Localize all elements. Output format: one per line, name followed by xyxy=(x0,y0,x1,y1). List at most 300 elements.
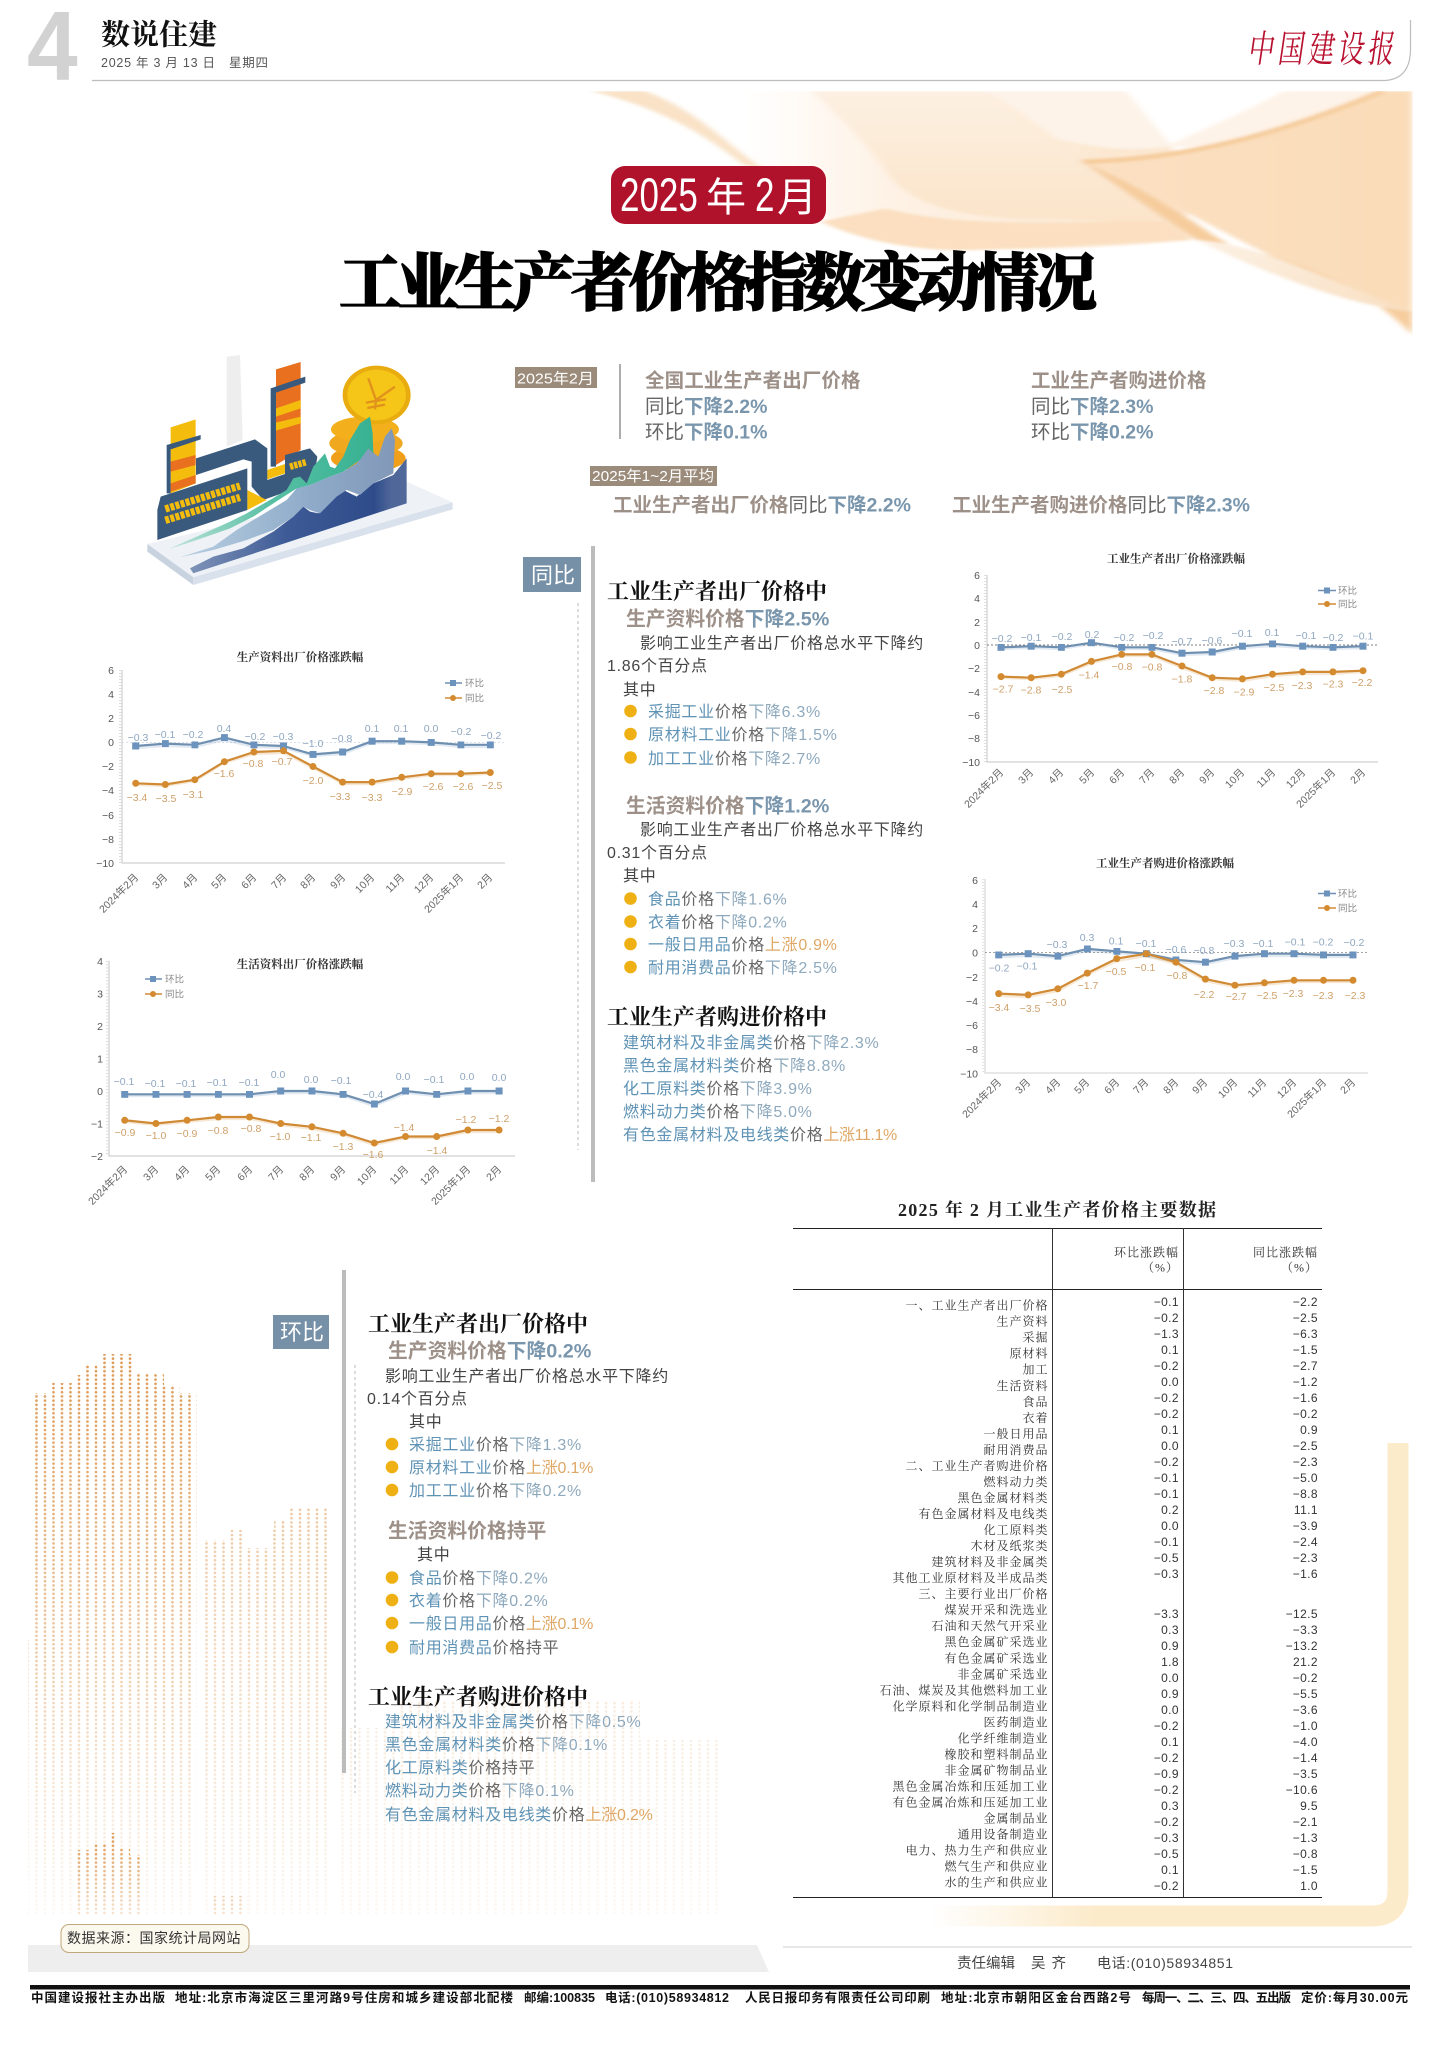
chart: 生活资料出厂价格涨跌幅: 0.0 xyxy=(271,1069,285,1081)
column: 同比 values: −4.0 xyxy=(1293,1735,1318,1749)
block: purchase list: 化工原料类价格下降3.9% xyxy=(623,1080,813,1098)
table header: 环比涨跌幅 xyxy=(1114,1245,1179,1260)
row labels: 电力、热力生产和供应业 xyxy=(905,1843,1048,1858)
chart: 生活资料出厂价格涨跌幅: 2月 xyxy=(484,1164,504,1184)
chart: 工业生产者购进价格涨跌幅: −0.1 xyxy=(1285,936,1306,948)
chart: 工业生产者出厂价格涨跌幅: 2025年1月 xyxy=(1293,766,1338,811)
chart: 工业生产者购进价格涨跌幅: −0.1 xyxy=(1136,938,1157,950)
panel: purchase prices: 同比下降2.3% xyxy=(1031,396,1153,418)
column: 环比 values: −0.2 xyxy=(1154,1751,1179,1765)
column: 同比 values: −12.5 xyxy=(1286,1607,1318,1621)
column: 环比 values: 0.1 xyxy=(1161,1863,1179,1877)
chart: 生产资料出厂价格涨跌幅: −10 xyxy=(96,858,114,870)
footer imprint: 人民日报印务有限责任公司印刷 xyxy=(745,1990,930,2005)
block: means of production: 采掘工业价格下降6.3% xyxy=(648,703,821,721)
row labels: 加工 xyxy=(1022,1362,1048,1377)
chart: 生产资料出厂价格涨跌幅: −3.3 xyxy=(330,791,351,803)
date pill: 月 xyxy=(777,176,817,220)
chart: 工业生产者购进价格涨跌幅: −1.7 xyxy=(1078,980,1099,992)
chart: 工业生产者出厂价格涨跌幅: −2.7 xyxy=(993,684,1014,696)
row labels: 化工原料类 xyxy=(983,1522,1048,1537)
row labels: 有色金属矿采选业 xyxy=(944,1650,1048,1665)
chart: 工业生产者出厂价格涨跌幅: 同比 xyxy=(1338,598,1357,610)
chart: 工业生产者购进价格涨跌幅: −2.3 xyxy=(1313,990,1334,1002)
editor credit xyxy=(957,1955,1233,1972)
column: 同比 values: −3.6 xyxy=(1293,1703,1318,1717)
chart: 生产资料出厂价格涨跌幅: 2024年2月 xyxy=(96,871,141,916)
block: means of production: 0.14个百分点 xyxy=(367,1390,468,1408)
table header xyxy=(1114,1245,1318,1274)
chart: 生产资料出厂价格涨跌幅: 9月 xyxy=(328,872,348,892)
editor credit: 电话:(010)58934851 xyxy=(1097,1955,1233,1971)
chart: 工业生产者出厂价格涨跌幅: 0.2 xyxy=(1085,629,1099,641)
row labels: 二、工业生产者购进价格 xyxy=(905,1458,1048,1473)
column: 同比 values: −1.6 xyxy=(1293,1567,1318,1581)
chart: 生活资料出厂价格涨跌幅: 5月 xyxy=(203,1164,223,1184)
column: 环比 values: −0.3 xyxy=(1154,1567,1179,1581)
row labels: 黑色金属材料类 xyxy=(957,1490,1048,1505)
chart: 工业生产者购进价格涨跌幅: −0.1 xyxy=(1017,960,1038,972)
column: 同比 values: −6.3 xyxy=(1293,1327,1318,1341)
column: 同比 values: 21.2 xyxy=(1293,1655,1318,1669)
chart: 生活资料出厂价格涨跌幅: 0.0 xyxy=(492,1072,506,1084)
column: 环比 values: −0.5 xyxy=(1154,1551,1179,1565)
column: 同比 values: −1.0 xyxy=(1293,1719,1318,1733)
chart: 工业生产者出厂价格涨跌幅: −10 xyxy=(962,757,980,769)
panel: purchase prices xyxy=(1031,370,1207,444)
chart: 生产资料出厂价格涨跌幅: −3.4 xyxy=(127,792,148,804)
chart: 工业生产者出厂价格涨跌幅: −2.9 xyxy=(1234,686,1255,698)
block: purchase list: 有色金属材料及电线类价格上涨0.2% xyxy=(385,1806,653,1824)
chart: 工业生产者购进价格涨跌幅: −0.2 xyxy=(1344,937,1365,949)
chart: 工业生产者购进价格涨跌幅: −3.0 xyxy=(1046,997,1067,1009)
column: 环比 values: 0.9 xyxy=(1161,1687,1179,1701)
data source callout: 数据来源：国家统计局网站 xyxy=(67,1930,241,1946)
chart: 生产资料出厂价格涨跌幅: −0.3 xyxy=(273,731,294,743)
chart: 生产资料出厂价格涨跌幅: 10月 xyxy=(353,872,377,896)
chart: 生活资料出厂价格涨跌幅: −1.0 xyxy=(270,1131,291,1143)
panel: national ex-factory prices: 全国工业生产者出厂价格 xyxy=(645,369,861,392)
chart: 工业生产者出厂价格涨跌幅: 工业生产者出厂价格涨跌幅 xyxy=(1107,552,1245,566)
chart: 生产资料出厂价格涨跌幅: 4月 xyxy=(180,872,200,892)
chart: 生活资料出厂价格涨跌幅: −0.8 xyxy=(208,1125,229,1137)
chart: 工业生产者出厂价格涨跌幅: 4 xyxy=(974,593,980,605)
chart: 工业生产者出厂价格涨跌幅: 8月 xyxy=(1167,767,1187,787)
chart: 工业生产者购进价格涨跌幅: 7月 xyxy=(1131,1077,1151,1097)
block: means of production: 生产资料价格下降2.5% xyxy=(626,609,830,631)
panel: national ex-factory prices: 同比下降2.2% xyxy=(645,396,767,418)
chart: 生活资料出厂价格涨跌幅: 7月 xyxy=(266,1164,286,1184)
chart: 生活资料出厂价格涨跌幅: 环比 xyxy=(165,974,184,986)
block: purchase list: 黑色金属材料类价格下降8.8% xyxy=(623,1057,846,1075)
chart: 工业生产者出厂价格涨跌幅: 4月 xyxy=(1046,767,1066,787)
chart: 生产资料出厂价格涨跌幅: 0 xyxy=(108,737,114,749)
chart: 生活资料出厂价格涨跌幅: −1 xyxy=(91,1118,103,1130)
column: 环比 values: −0.2 xyxy=(1154,1311,1179,1325)
block: means of production: 加工工业价格下降0.2% xyxy=(409,1482,582,1500)
column: 同比 values: −2.3 xyxy=(1293,1551,1318,1565)
block: purchase list: 建筑材料及非金属类价格下降2.3% xyxy=(623,1034,879,1052)
row labels: 三、主要行业出厂价格 xyxy=(918,1586,1048,1601)
column: 同比 values: −2.5 xyxy=(1293,1311,1318,1325)
chart: 生产资料出厂价格涨跌幅: −2.5 xyxy=(482,780,503,792)
block: consumer goods: 一般日用品价格上涨0.1% xyxy=(409,1615,593,1633)
chart: 工业生产者购进价格涨跌幅: 8月 xyxy=(1161,1077,1181,1097)
chart: 工业生产者购进价格涨跌幅: −0.6 xyxy=(1166,944,1187,956)
section name: 数说住建 xyxy=(101,18,217,52)
row labels: 黑色金属冶炼和压延加工业 xyxy=(892,1778,1048,1794)
panel: national ex-factory prices: 环比下降0.1% xyxy=(645,422,767,444)
chart: 生活资料出厂价格涨跌幅: −1.4 xyxy=(427,1145,448,1157)
chart: 生活资料出厂价格涨跌幅: −0.1 xyxy=(114,1076,135,1088)
chart: 生活资料出厂价格涨跌幅: −1.1 xyxy=(301,1132,322,1144)
chart: 生产资料出厂价格涨跌幅: 2 xyxy=(108,713,114,725)
chart: 工业生产者购进价格涨跌幅: −4 xyxy=(966,996,978,1008)
chart: 生产资料出厂价格涨跌幅: −2.6 xyxy=(423,781,444,793)
date pill: 2 xyxy=(755,168,774,221)
chart: 工业生产者购进价格涨跌幅: −0.2 xyxy=(1313,936,1334,948)
tag: 环比: 环比 xyxy=(280,1320,324,1345)
chart: 生活资料出厂价格涨跌幅: 生活资料出厂价格涨跌幅 xyxy=(237,957,364,971)
column: 同比 values: −2.4 xyxy=(1293,1535,1318,1549)
chart: 生产资料出厂价格涨跌幅: 8月 xyxy=(298,872,318,892)
column: 环比 values: −0.3 xyxy=(1154,1831,1179,1845)
chart: 工业生产者出厂价格涨跌幅: −6 xyxy=(968,710,980,722)
block: means of production: 原材料工业价格下降1.5% xyxy=(648,726,838,744)
column: 环比 values: 0.1 xyxy=(1161,1343,1179,1357)
chart: 生产资料出厂价格涨跌幅: 0.1 xyxy=(365,723,379,735)
date pill: 2025 xyxy=(620,168,698,221)
chart: 生活资料出厂价格涨跌幅: 0.0 xyxy=(304,1074,318,1086)
chart: 生活资料出厂价格涨跌幅: −0.9 xyxy=(115,1127,136,1139)
chart: 生活资料出厂价格涨跌幅: 2024年2月 xyxy=(85,1163,130,1208)
chart: 生活资料出厂价格涨跌幅: −2 xyxy=(91,1151,103,1163)
column: 同比 values: −10.6 xyxy=(1286,1783,1318,1797)
date pill: 年 xyxy=(706,176,746,220)
chart: 生活资料出厂价格涨跌幅: −1.3 xyxy=(333,1141,354,1153)
block: consumer goods: 生活资料价格持平 xyxy=(388,1521,546,1543)
chart: 工业生产者购进价格涨跌幅: −2.5 xyxy=(1257,990,1278,1002)
row labels: 非金属矿采选业 xyxy=(957,1666,1048,1681)
chart: 生活资料出厂价格涨跌幅: −0.1 xyxy=(331,1075,352,1087)
column: 同比 values: 11.1 xyxy=(1294,1503,1318,1517)
chart: 生产资料出厂价格涨跌幅: −2 xyxy=(102,761,114,773)
column: 同比 values: −1.5 xyxy=(1293,1863,1318,1877)
row labels: 一般日用品 xyxy=(983,1427,1048,1441)
chart: 生活资料出厂价格涨跌幅: −0.1 xyxy=(176,1078,197,1090)
footer imprint: 电话:(010)58934812 xyxy=(605,1990,729,2005)
row labels: 石油、煤炭及其他燃料加工业 xyxy=(879,1682,1048,1697)
chart: 工业生产者购进价格涨跌幅: −2.7 xyxy=(1226,991,1247,1003)
block: means of production: 生产资料价格下降0.2% xyxy=(388,1341,592,1363)
panel: purchase prices: 环比下降0.2% xyxy=(1031,422,1153,444)
block: purchase list: 燃料动力类价格下降0.1% xyxy=(385,1782,575,1800)
chart: 生活资料出厂价格涨跌幅: 4月 xyxy=(172,1164,192,1184)
chart: 工业生产者出厂价格涨跌幅: 3月 xyxy=(1016,767,1036,787)
chart: 生产资料出厂价格涨跌幅: 6 xyxy=(108,665,114,677)
column: 环比 values: −1.3 xyxy=(1154,1327,1179,1341)
chart: 工业生产者出厂价格涨跌幅: −1.8 xyxy=(1172,674,1193,686)
chart: 生活资料出厂价格涨跌幅: 11月 xyxy=(387,1164,411,1187)
chart: 生活资料出厂价格涨跌幅: −0.9 xyxy=(177,1128,198,1140)
chart: 工业生产者购进价格涨跌幅: −0.5 xyxy=(1106,966,1127,978)
row labels: 通用设备制造业 xyxy=(957,1827,1048,1842)
chart: 生产资料出厂价格涨跌幅: 4 xyxy=(108,689,114,701)
chart: 工业生产者出厂价格涨跌幅: 2月 xyxy=(1348,767,1368,787)
chart: 生产资料出厂价格涨跌幅: 6月 xyxy=(239,872,259,892)
chart: 工业生产者出厂价格涨跌幅: 2 xyxy=(974,617,980,629)
column: 同比 values: −3.5 xyxy=(1293,1767,1318,1781)
chart: 工业生产者购进价格涨跌幅: 5月 xyxy=(1072,1077,1092,1097)
newspaper logo: 中国建设报 xyxy=(1246,28,1402,71)
chart: 生产资料出厂价格涨跌幅: −3.5 xyxy=(156,793,177,805)
chart: 工业生产者购进价格涨跌幅: −0.3 xyxy=(1224,938,1245,950)
column: 环比 values: 0.2 xyxy=(1161,1503,1179,1517)
title: 工业生产者价格指数变动情况 xyxy=(339,249,1097,319)
chart: 生产资料出厂价格涨跌幅: −2.6 xyxy=(453,781,474,793)
chart: 生产资料出厂价格涨跌幅: −1.6 xyxy=(214,768,235,780)
chart: 生产资料出厂价格涨跌幅: −6 xyxy=(102,810,114,822)
chart: 生活资料出厂价格涨跌幅: 10月 xyxy=(355,1164,379,1188)
chart: 工业生产者出厂价格涨跌幅: −2.2 xyxy=(1352,677,1373,689)
panel: purchase prices: 工业生产者购进价格 xyxy=(1031,370,1207,392)
chart: 工业生产者购进价格涨跌幅: 2025年1月 xyxy=(1284,1076,1329,1121)
column: 同比 values: 1.0 xyxy=(1300,1879,1318,1893)
chart: 工业生产者出厂价格涨跌幅: −2.8 xyxy=(1021,684,1042,696)
column: 环比 values: −0.1 xyxy=(1154,1295,1179,1309)
block: consumer goods: 衣着价格下降0.2% xyxy=(409,1592,548,1610)
data source callout xyxy=(61,1924,249,1952)
footer imprint: 每周一、二、三、四、五出版 xyxy=(1142,1990,1291,2005)
chart: 工业生产者出厂价格涨跌幅 xyxy=(961,552,1378,811)
block: consumer goods xyxy=(386,1521,593,1657)
chart: 生产资料出厂价格涨跌幅: −0.2 xyxy=(183,729,204,741)
chart: 生产资料出厂价格涨跌幅: 11月 xyxy=(383,872,407,895)
footer imprint: 定价:每月30.00元 xyxy=(1301,1990,1408,2005)
column: 同比 values: −8.8 xyxy=(1293,1487,1318,1501)
illustration: factory with coins and area chart xyxy=(147,355,453,585)
date pill xyxy=(611,166,826,224)
column: 同比 values: −1.4 xyxy=(1293,1751,1318,1765)
chart: 工业生产者出厂价格涨跌幅: −0.6 xyxy=(1202,635,1223,647)
row labels: 金属制品业 xyxy=(983,1811,1048,1826)
chart: 工业生产者购进价格涨跌幅: 9月 xyxy=(1190,1077,1210,1097)
chart: 工业生产者出厂价格涨跌幅: −0.2 xyxy=(1323,632,1344,644)
table header: （%） xyxy=(1281,1260,1318,1274)
chart: 生产资料出厂价格涨跌幅: −0.3 xyxy=(128,732,149,744)
chart: 生活资料出厂价格涨跌幅: −0.1 xyxy=(207,1077,228,1089)
dotted city skyline background xyxy=(28,1354,720,1915)
chart: 工业生产者购进价格涨跌幅: −2.3 xyxy=(1345,990,1366,1002)
chart: 生产资料出厂价格涨跌幅: 环比 xyxy=(465,678,484,690)
row labels: 木材及纸浆类 xyxy=(970,1538,1048,1553)
chart: 生活资料出厂价格涨跌幅: 1 xyxy=(97,1054,103,1066)
chart: 工业生产者出厂价格涨跌幅: −0.1 xyxy=(1353,630,1374,642)
block: consumer goods: 生活资料价格下降1.2% xyxy=(626,796,830,818)
column: 同比 values: 9.5 xyxy=(1300,1799,1318,1813)
column: 环比 values: 0.1 xyxy=(1161,1423,1179,1437)
chart: 工业生产者购进价格涨跌幅: −3.5 xyxy=(1020,1003,1041,1015)
ribbon background xyxy=(591,91,1412,335)
divider xyxy=(619,364,621,439)
tag: 环比 xyxy=(273,1315,329,1349)
issue date: 2025 年 3 月 13 日 星期四 xyxy=(101,56,269,70)
chart: 工业生产者出厂价格涨跌幅: −0.1 xyxy=(1296,630,1317,642)
chart: 生活资料出厂价格涨跌幅: −0.4 xyxy=(363,1089,384,1101)
chart: 生活资料出厂价格涨跌幅: 12月 xyxy=(418,1164,442,1188)
row labels: 化学原料和化学制品制造业 xyxy=(892,1698,1048,1713)
chart: 工业生产者购进价格涨跌幅: −10 xyxy=(960,1068,978,1080)
chart: 生产资料出厂价格涨跌幅: 2025年1月 xyxy=(421,871,466,916)
chart: 生活资料出厂价格涨跌幅: 3 xyxy=(97,988,103,1000)
chart: 生活资料出厂价格涨跌幅: −1.0 xyxy=(146,1130,167,1142)
chart: 工业生产者出厂价格涨跌幅: 5月 xyxy=(1077,767,1097,787)
block: means of production: 1.86个百分点 xyxy=(607,657,708,675)
tag: 同比: 同比 xyxy=(531,563,575,588)
row labels: 化学纤维制造业 xyxy=(957,1730,1048,1745)
chart: 工业生产者购进价格涨跌幅: 0 xyxy=(972,948,978,960)
chart: 生产资料出厂价格涨跌幅: 5月 xyxy=(209,872,229,892)
chart: 工业生产者出厂价格涨跌幅: 6 xyxy=(974,570,980,582)
chart: 工业生产者购进价格涨跌幅: 11月 xyxy=(1245,1077,1269,1100)
chart: 工业生产者出厂价格涨跌幅: −0.8 xyxy=(1112,661,1133,673)
chart: 生产资料出厂价格涨跌幅: −2.9 xyxy=(392,786,413,798)
block: means of production: 原材料工业价格上涨0.1% xyxy=(409,1459,593,1477)
chart: 生产资料出厂价格涨跌幅: −3.1 xyxy=(183,789,204,801)
block: purchase list: 黑色金属材料类价格下降0.1% xyxy=(385,1736,608,1754)
block: purchase list: 燃料动力类价格下降5.0% xyxy=(623,1103,813,1121)
chart: 生活资料出厂价格涨跌幅: 8月 xyxy=(297,1164,317,1184)
block: consumer goods: 一般日用品价格上涨0.9% xyxy=(648,936,838,954)
column: 同比 values: −2.7 xyxy=(1293,1359,1318,1373)
chart: 工业生产者出厂价格涨跌幅: −2.3 xyxy=(1292,680,1313,692)
chart: 生活资料出厂价格涨跌幅: 6月 xyxy=(235,1164,255,1184)
data table xyxy=(793,1199,1322,1898)
chart: 生活资料出厂价格涨跌幅: 9月 xyxy=(328,1164,348,1184)
chart: 工业生产者出厂价格涨跌幅: −0.2 xyxy=(992,633,1013,645)
panel: Jan-Feb average xyxy=(613,494,1250,516)
chart: 生产资料出厂价格涨跌幅: −0.7 xyxy=(272,756,293,768)
column: 同比 values: −1.6 xyxy=(1293,1391,1318,1405)
editor line rule xyxy=(783,1946,1412,1948)
chart: 工业生产者出厂价格涨跌幅: −2.8 xyxy=(1204,685,1225,697)
column: 环比 values: −0.2 xyxy=(1154,1391,1179,1405)
column: 环比 values: −3.3 xyxy=(1154,1607,1179,1621)
bottom gray band xyxy=(28,1945,769,1972)
chart: 工业生产者出厂价格涨跌幅: −0.1 xyxy=(1232,628,1253,640)
chart: 工业生产者出厂价格涨跌幅: 11月 xyxy=(1254,767,1278,790)
chart: 工业生产者出厂价格涨跌幅: −0.7 xyxy=(1172,636,1193,648)
chart: 工业生产者购进价格涨跌幅: 工业生产者购进价格涨跌幅 xyxy=(1096,856,1234,870)
chart: 生产资料出厂价格涨跌幅: 3月 xyxy=(150,872,170,892)
chart: 工业生产者出厂价格涨跌幅: −0.1 xyxy=(1021,632,1042,644)
chart: 工业生产者购进价格涨跌幅: 环比 xyxy=(1338,888,1357,900)
row labels: 有色金属材料及电线类 xyxy=(918,1506,1048,1521)
block: consumer goods: 0.31个百分点 xyxy=(607,844,708,862)
row labels: 原材料 xyxy=(1009,1346,1048,1361)
chart: 生活资料出厂价格涨跌幅: −0.1 xyxy=(239,1077,260,1089)
column: 同比 values: −2.5 xyxy=(1293,1439,1318,1453)
column: 同比 values: −0.2 xyxy=(1293,1671,1318,1685)
chart: 生产资料出厂价格涨跌幅: 0.0 xyxy=(424,723,438,735)
chart: 工业生产者购进价格涨跌幅: 2 xyxy=(972,923,978,935)
block: means of production: 其中 xyxy=(623,681,656,699)
block: means of production: 影响工业生产者出厂价格总水平下降约 xyxy=(640,635,924,653)
column: 同比 values: −13.2 xyxy=(1286,1639,1318,1653)
heading: ex-factory: 工业生产者出厂价格中 xyxy=(368,1311,588,1336)
chart: 工业生产者出厂价格涨跌幅: −0.2 xyxy=(1114,632,1135,644)
chart: 生产资料出厂价格涨跌幅: −0.2 xyxy=(451,726,472,738)
chart: 工业生产者购进价格涨跌幅: 12月 xyxy=(1275,1077,1299,1101)
row labels: 建筑材料及非金属类 xyxy=(931,1554,1048,1569)
heading: purchase: 工业生产者购进价格中 xyxy=(607,1004,827,1029)
row labels: 燃气生产和供应业 xyxy=(944,1859,1048,1874)
block: means of production: 采掘工业价格下降1.3% xyxy=(409,1436,582,1454)
chart: 生产资料出厂价格涨跌幅: 12月 xyxy=(412,872,436,896)
footer imprint: 中国建设报社主办出版 xyxy=(31,1990,165,2005)
panel: Jan-Feb average: 工业生产者出厂价格同比下降2.2% xyxy=(613,494,911,516)
column: 同比 values: −0.8 xyxy=(1293,1847,1318,1861)
column: 同比 values: −2.2 xyxy=(1293,1295,1318,1309)
tag: 2025年2月: 2025年2月 xyxy=(517,370,594,388)
row labels: 燃料动力类 xyxy=(983,1474,1048,1489)
chart: 工业生产者出厂价格涨跌幅: −2.5 xyxy=(1052,684,1073,696)
chart: 工业生产者购进价格涨跌幅: 4月 xyxy=(1043,1077,1063,1097)
chart: 工业生产者出厂价格涨跌幅: −0.2 xyxy=(1052,631,1073,643)
block: consumer goods: 耐用消费品价格持平 xyxy=(409,1639,559,1657)
chart: 工业生产者购进价格涨跌幅: 4 xyxy=(972,899,978,911)
chart: 工业生产者购进价格涨跌幅: −0.3 xyxy=(1047,939,1068,951)
block: consumer goods: 耐用消费品价格下降2.5% xyxy=(648,959,838,977)
row labels: 生产资料 xyxy=(996,1314,1048,1329)
column: 环比 values: −0.2 xyxy=(1154,1815,1179,1829)
chart: 工业生产者购进价格涨跌幅: −2 xyxy=(966,972,978,984)
row labels: 黑色金属矿采选业 xyxy=(944,1634,1048,1649)
column: 环比 values: 0.3 xyxy=(1161,1623,1179,1637)
column: 环比 values: −0.1 xyxy=(1154,1487,1179,1501)
table header: （%） xyxy=(1142,1260,1179,1274)
footer imprint: 地址:北京市海淀区三里河路9号住房和城乡建设部北配楼 xyxy=(175,1990,513,2005)
column: 环比 values: −0.2 xyxy=(1154,1359,1179,1373)
header rule xyxy=(92,20,1410,80)
chart: 工业生产者出厂价格涨跌幅: 0.1 xyxy=(1265,627,1279,639)
chart: 工业生产者购进价格涨跌幅: −0.1 xyxy=(1253,938,1274,950)
chart: 生产资料出厂价格涨跌幅: 2月 xyxy=(475,872,495,892)
chart: 生产资料出厂价格涨跌幅: −8 xyxy=(102,834,114,846)
chart: 工业生产者出厂价格涨跌幅: 10月 xyxy=(1223,767,1247,791)
chart: 工业生产者购进价格涨跌幅: −2.3 xyxy=(1283,988,1304,1000)
chart: 生产资料出厂价格涨跌幅: 0.1 xyxy=(394,723,408,735)
chart: 工业生产者出厂价格涨跌幅: −0.8 xyxy=(1142,662,1163,674)
block: purchase list xyxy=(385,1713,653,1824)
chart: 生活资料出厂价格涨跌幅: −1.6 xyxy=(363,1149,384,1161)
chart: 生产资料出厂价格涨跌幅: −4 xyxy=(102,785,114,797)
row labels: 橡胶和塑料制品业 xyxy=(944,1746,1048,1761)
chart: 生产资料出厂价格涨跌幅: 生产资料出厂价格涨跌幅 xyxy=(237,650,364,664)
block: consumer goods: 食品价格下降0.2% xyxy=(409,1570,548,1588)
chart: 生活资料出厂价格涨跌幅: 同比 xyxy=(165,988,184,1000)
block: purchase list: 有色金属材料及电线类价格上涨11.1% xyxy=(623,1126,897,1144)
footer imprint: 邮编:100835 xyxy=(524,1990,595,2005)
chart: 生活资料出厂价格涨跌幅 xyxy=(85,956,515,1208)
chart: 工业生产者购进价格涨跌幅: −0.8 xyxy=(1167,970,1188,982)
chart: 生活资料出厂价格涨跌幅: −1.2 xyxy=(489,1113,510,1125)
block: means of production xyxy=(367,1341,669,1500)
chart: 生产资料出厂价格涨跌幅: −0.8 xyxy=(243,758,264,770)
chart: 工业生产者购进价格涨跌幅: −8 xyxy=(966,1044,978,1056)
column: 环比 values: 0.3 xyxy=(1161,1799,1179,1813)
row labels: 生活资料 xyxy=(996,1378,1048,1393)
